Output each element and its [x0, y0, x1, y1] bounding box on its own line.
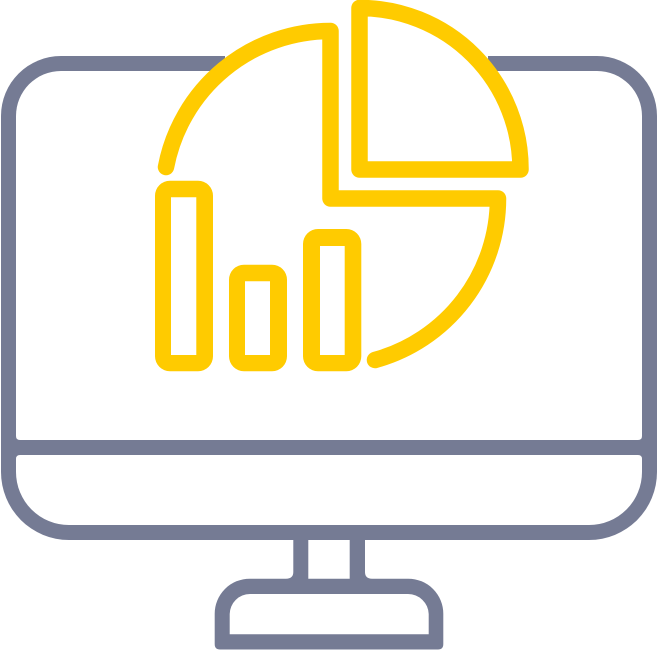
- monitor stand: [215, 540, 443, 650]
- pie chart: [166, 8, 521, 360]
- monitor body: [1, 54, 657, 540]
- bar chart: [155, 181, 361, 371]
